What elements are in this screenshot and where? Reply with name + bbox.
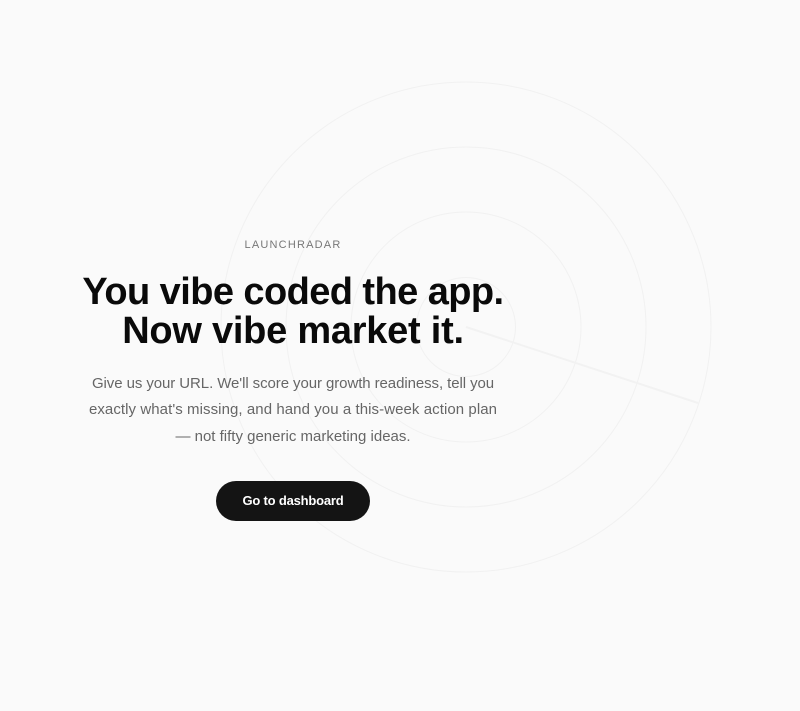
headline: Now vibe market it.: [122, 310, 464, 352]
description text: Give us your URL. We'll score your growth readiness, tell you: [92, 375, 494, 392]
eyebrow label: LAUNCHRADAR: [245, 239, 341, 251]
headline: [82, 271, 504, 352]
button: go to dashboard: [216, 481, 370, 521]
button: go to dashboard: Go to dashboard: [242, 493, 344, 508]
description text: exactly what's missing, and hand you a this-week action plan: [89, 401, 497, 418]
description text: [89, 375, 497, 445]
headline: You vibe coded the app.: [82, 271, 504, 313]
description text: — not fifty generic marketing ideas.: [175, 428, 411, 445]
